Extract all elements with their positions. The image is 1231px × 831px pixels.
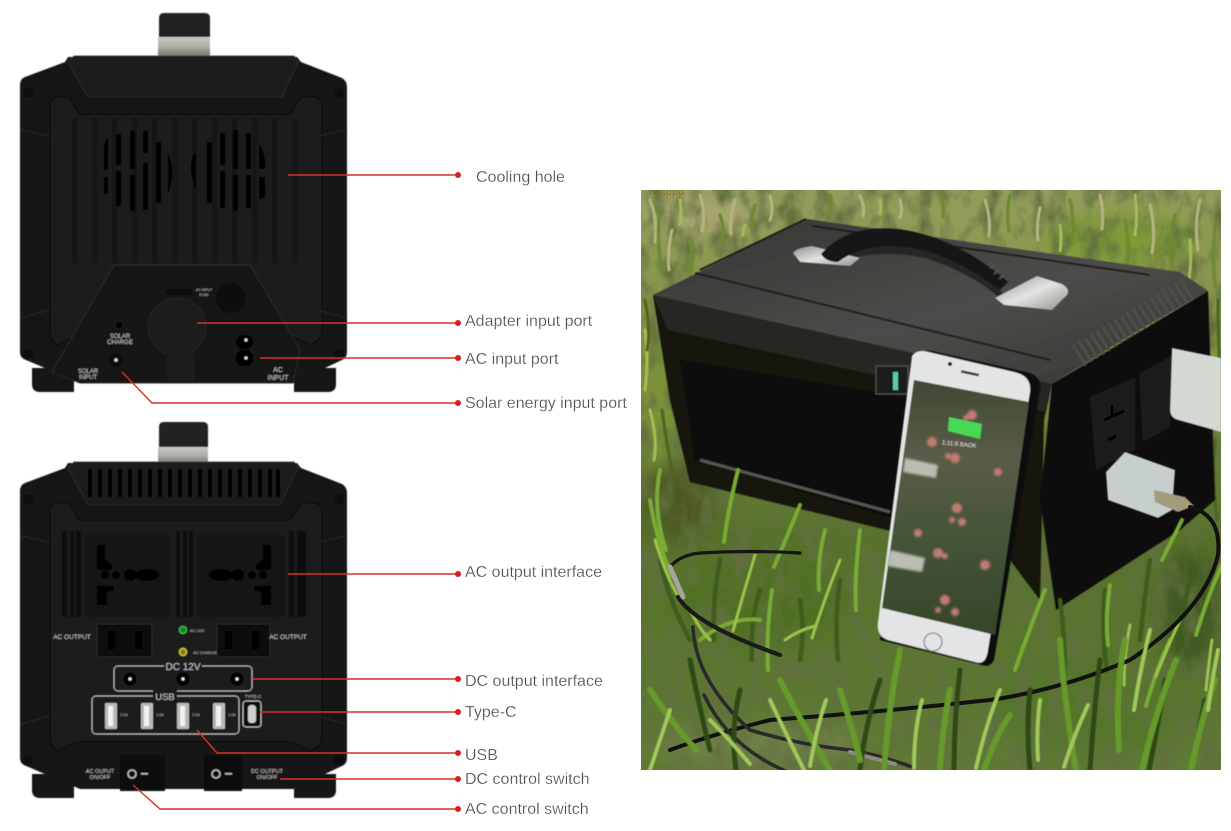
rear input panel [52,265,300,383]
icon: adapter input socket [139,283,246,382]
callout: adapter input port: Adapter input port [465,313,593,330]
icon: smartphone: 1:11:8 BAOK [942,440,977,450]
icon: status LEDs: AC CHARGE [193,650,217,655]
callout: Type-C: Type-C [465,704,517,721]
callout: Type-C [260,704,517,721]
mid grass blades [650,470,1222,706]
icon: USB ports panel [92,690,239,734]
icon: Type-C port: TYPE-C [245,694,262,699]
callout: DC output interface [252,673,603,690]
callout: DC output interface: DC output interface [465,673,603,690]
battery icon [948,417,982,439]
icon: status LEDs: AC LED [190,628,204,633]
callout: solar energy input port [122,372,627,412]
callout: cooling hole [288,169,565,186]
icon: side vent fins [1078,288,1188,356]
icon: DC 12V output panel [114,660,252,691]
icon: AC input socket: AC [273,367,283,374]
callout: AC output interface: AC output interface [465,564,602,581]
icon: carry handle [793,228,1068,310]
callout: USB: USB [465,747,498,764]
top face [653,219,1208,384]
icon: AC and DC control switches: ON/OFF [257,775,278,781]
icon: USB ports panel: 1.0A [156,713,164,717]
callout: AC control switch: AC control switch [465,801,589,818]
foreground grass blades [650,630,1218,770]
panel: rear view of power station [20,13,347,392]
icon: solar input jack: SOLAR [110,334,131,340]
icon: status LEDs [180,626,217,656]
callout: solar energy input port: Solar energy input port [465,395,627,412]
cables [670,507,1218,775]
icon: AC and DC control switches: DC OUTPUT [251,769,284,775]
right face [1040,291,1215,610]
icon: solar input jack: SOLAR [78,369,99,375]
icon: USB ports panel: 2.1A [120,713,128,717]
rear body [20,57,347,392]
callout: USB [197,730,498,764]
icon: rear handle [158,13,210,56]
icon: adapter input socket: AC INPUT [196,288,213,292]
icon: adapter input socket: FUSE [199,293,209,297]
watermark: Ratopo [649,187,684,198]
icon: small AC outlets [53,624,307,657]
icon: solar input jack [78,322,133,381]
icon: solar input jack: INPUT [79,375,97,381]
icon: AC output interface sockets [62,531,306,617]
icon: small AC outlets: AC OUTPUT [269,634,307,641]
icon: smartphone [878,351,1040,666]
battery indicator [876,366,908,394]
callout: AC input port [260,351,559,368]
callout: DC control switch [280,771,589,788]
icon: cooling hole fan grilles [104,130,265,211]
panel: front view of power station [20,422,347,798]
front face [653,295,1052,600]
icon: top vent fins [68,462,298,505]
callout: DC control switch: DC control switch [465,771,589,788]
icon: AC input socket: INPUT [268,375,289,382]
callout: AC input port: AC input port [465,351,559,368]
icon: small AC outlets: AC OUTPUT [53,634,91,641]
icon: USB chargers [1106,348,1221,518]
icon: AC input socket [230,328,289,382]
side AC sockets [1090,378,1135,470]
icon: Type-C port [243,694,262,727]
icon: AC and DC control switches: AC OUPUT [86,769,115,775]
power station body [653,219,1215,610]
callout: AC output interface [288,564,602,581]
callout: cooling hole: Cooling hole [476,169,565,186]
icon: USB ports panel: 1.0A [228,713,236,717]
icon: AC and DC control switches: ON/OFF [90,775,111,781]
icon: AC and DC control switches [86,755,284,791]
icon: solar input jack: CHARGE [107,340,133,346]
grass background [638,190,1221,770]
phone screen [882,380,1029,635]
callout: AC control switch [133,785,589,818]
top bevel [68,56,298,97]
icon: USB ports panel: 2.1A [192,713,200,717]
icon: front handle [158,422,208,464]
front body [20,463,347,798]
icon: USB ports panel: USB [155,692,175,703]
panel: photo of power station charging phone on grass [638,187,1222,775]
callout: adapter input port [197,313,593,330]
icon: DC 12V output panel: DC 12V [165,662,201,673]
background grass blades behind device [645,195,1220,520]
